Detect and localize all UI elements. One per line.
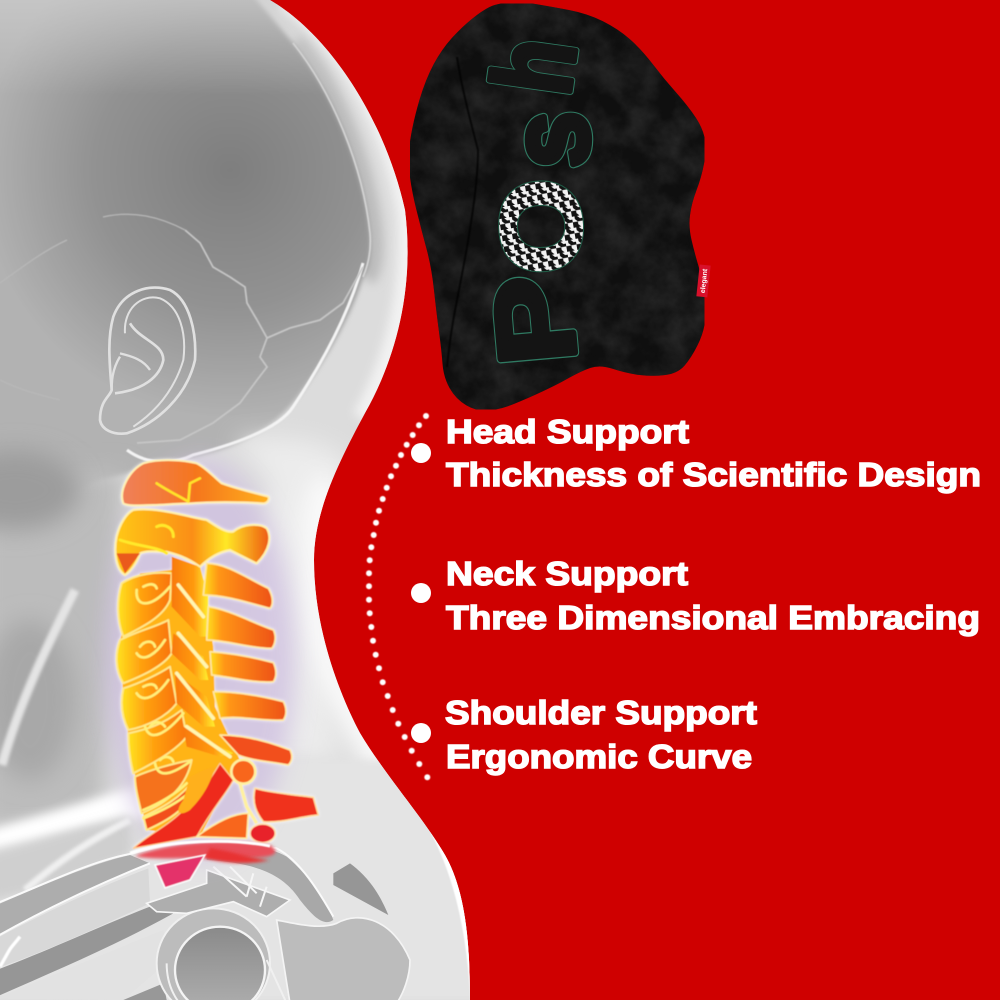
text: shoulder support [445, 694, 757, 775]
pillow side seam [447, 57, 478, 367]
vertebra loops and highlights [137, 584, 190, 818]
pillow body [410, 4, 704, 409]
top fade [0, 0, 334, 78]
pedicle wedges [172, 557, 233, 757]
scalp shading [293, 43, 371, 277]
shoulder light base [88, 757, 470, 998]
shoulder blade [277, 918, 410, 1000]
embroidered letter h: h [469, 30, 600, 101]
spine illustration [115, 460, 318, 848]
shoulder and rib structures [0, 760, 480, 1000]
bullet: shoulder support [411, 723, 431, 743]
text: shoulder support: Ergonomic Curve [446, 738, 752, 775]
neck right light area [236, 427, 348, 756]
clavicle right band [207, 846, 333, 922]
houndstooth letter O: O [477, 177, 605, 276]
embroidered letter P: P [470, 271, 599, 370]
bullet: head support [411, 443, 431, 463]
pink lower vertebra [130, 841, 275, 888]
pillow product [410, 4, 711, 409]
red brand tag: elegant [700, 268, 709, 294]
column backing [120, 567, 240, 837]
first clavicle band [0, 855, 150, 937]
houndstooth letter O: O [477, 177, 605, 276]
embroidered letter P: P [470, 271, 599, 370]
figure: translucent head, neck and shoulder [0, 0, 520, 1000]
shoulder bright band [0, 785, 150, 850]
vertebra bodies [117, 573, 187, 773]
red brand tag [696, 264, 711, 297]
scapula grey shape [333, 863, 388, 915]
text: head support: Thickness of Scientific Design [446, 456, 981, 493]
third rib band [0, 930, 170, 1000]
bullet: neck support [411, 583, 431, 603]
vertebra C1 [122, 460, 269, 505]
clavicle highlight lines [0, 843, 333, 937]
text: neck support: Three Dimensional Embracing [446, 599, 980, 636]
text: head support [446, 413, 981, 493]
scalp rim highlight [285, 0, 408, 418]
embroidered letter h: h [469, 30, 600, 101]
second rib band [0, 907, 173, 997]
lower jaw bright line [127, 263, 363, 462]
text: shoulder support: Shoulder Support [445, 694, 757, 731]
lower vertebra processes [133, 763, 233, 848]
skull suture lines [137, 230, 363, 443]
embroidered letter s: s [487, 111, 612, 168]
spinous processes [203, 563, 286, 720]
vertebra C2 [115, 509, 269, 575]
dotted arc [366, 413, 430, 780]
rib ball inner [175, 927, 265, 1000]
rib ball outer [157, 908, 270, 1000]
skull and face base [0, 0, 372, 479]
neck glow behind spine [105, 460, 295, 860]
text: neck support: Neck Support [446, 555, 688, 592]
skull edge line [293, 43, 370, 277]
shoulder white edge [430, 831, 470, 997]
vertebra blocks [147, 870, 290, 917]
neck shading [0, 470, 125, 830]
text: neck support [446, 555, 980, 636]
band between [0, 868, 150, 968]
text: head support: Head Support [446, 413, 689, 450]
ear [100, 288, 195, 434]
embroidered letter s: s [487, 111, 612, 168]
